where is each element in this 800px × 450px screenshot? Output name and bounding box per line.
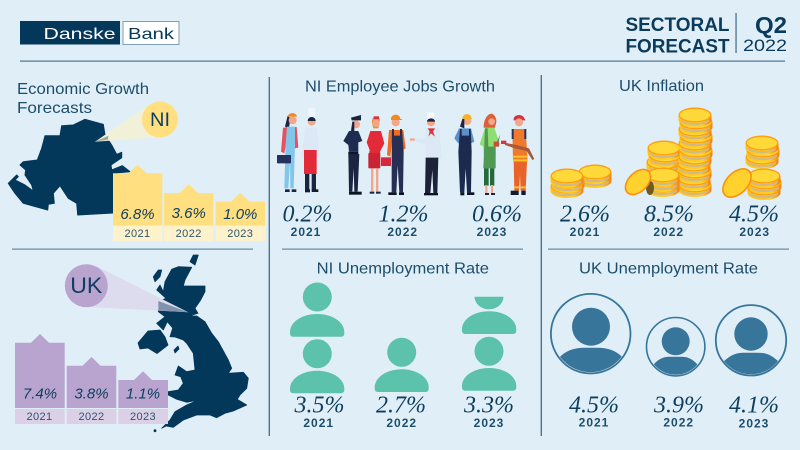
icon: person 2022 <box>375 338 429 392</box>
worker: gardener <box>480 114 500 195</box>
bar chart: NI growth: 2023 <box>227 228 253 240</box>
stat: UK unemployment 2021: 4.5% <box>569 392 619 418</box>
stat: inflation 2022: 8.5% <box>644 202 694 228</box>
stat: inflation 2022 <box>644 202 694 239</box>
worker: overalls with toolbox <box>277 113 298 192</box>
stat: inflation 2023: 2023 <box>739 225 770 239</box>
stat: jobs growth 2021: 2021 <box>291 225 321 239</box>
bar chart: NI growth <box>113 165 265 241</box>
stat: NI unemployment 2021: 2021 <box>303 416 334 430</box>
icon: coins 2021 <box>550 165 612 198</box>
worker: police officer <box>343 115 362 195</box>
heading: UK inflation: UK Inflation <box>619 78 704 95</box>
stat: NI unemployment 2023: 3.3% <box>463 392 514 418</box>
icon: people 2021 <box>290 282 344 393</box>
bar chart: UK growth: 2023 <box>130 411 156 423</box>
worker: flight attendant <box>367 116 384 194</box>
stat: UK unemployment 2022: 2022 <box>663 416 694 430</box>
bar chart: NI growth: 3.6% <box>172 205 206 222</box>
stat: inflation 2021: 2021 <box>570 225 600 239</box>
heading: NI employee jobs growth: NI Employee Jobs Growth <box>305 78 495 96</box>
bar chart: UK growth: 7.4% <box>23 386 57 402</box>
bar chart: UK growth: 3.8% <box>74 386 109 402</box>
logo: Danske Bank: Bank <box>128 26 175 43</box>
callout: UK <box>65 264 188 312</box>
title: sectoral forecast Q2 2022: SECTORAL <box>626 15 730 36</box>
stat: UK unemployment 2022 <box>653 392 704 430</box>
stat: UK unemployment 2023 <box>729 392 779 430</box>
stat: NI unemployment 2023 <box>463 392 514 430</box>
stat: UK unemployment 2023: 4.1% <box>729 392 779 418</box>
bar chart: NI growth: 2022 <box>176 228 202 240</box>
callout: NI <box>95 102 178 142</box>
stat: NI unemployment 2022 <box>376 392 426 430</box>
icon: coins 2023 <box>718 136 782 202</box>
icon: person circle 2022 <box>646 318 705 380</box>
stat: jobs growth 2021: 0.2% <box>282 202 332 228</box>
stat: inflation 2021: 2.6% <box>560 202 610 228</box>
stat: NI unemployment 2022: 2022 <box>386 416 417 430</box>
icon: person circle 2021 <box>551 294 630 380</box>
illustration: workers group two <box>410 112 534 195</box>
map: United Kingdom <box>138 255 248 432</box>
title: sectoral forecast Q2 2022 <box>626 12 787 58</box>
bar chart: UK growth: 2022 <box>78 411 105 423</box>
title: sectoral forecast Q2 2022: FORECAST <box>626 36 730 58</box>
bar chart: NI growth: 2021 <box>124 228 151 240</box>
stat: jobs growth 2022 <box>378 202 428 239</box>
heading: economic growth forecasts <box>17 81 149 117</box>
stat: jobs growth 2021 <box>282 202 332 239</box>
callout: NI: NI <box>150 110 170 131</box>
stat: UK unemployment 2023: 2023 <box>739 416 769 430</box>
illustration: workers group one <box>277 108 406 195</box>
worker: builder with toolbox <box>381 115 406 195</box>
icon: people 2023 <box>462 297 516 391</box>
heading: economic growth forecasts: Forecasts <box>17 100 92 117</box>
bar chart: UK growth: 1.1% <box>126 386 160 402</box>
stat: inflation 2021 <box>560 202 610 239</box>
stat: NI unemployment 2021: 3.5% <box>294 392 344 418</box>
heading: UK unemployment rate: UK Unemployment Rate <box>579 260 758 277</box>
stat: inflation 2022: 2022 <box>653 225 684 239</box>
bar chart: UK growth: 2021 <box>26 411 53 423</box>
stat: jobs growth 2022: 2022 <box>387 225 418 239</box>
callout: UK: UK <box>70 273 103 298</box>
worker: chef <box>301 108 320 192</box>
stat: NI unemployment 2021 <box>294 392 344 430</box>
icon: coins 2022 <box>621 108 712 199</box>
map: Northern Ireland <box>8 119 130 215</box>
title: sectoral forecast Q2 2022: Q2 <box>755 12 787 38</box>
stat: inflation 2023 <box>729 202 779 239</box>
worker: firefighter <box>501 115 534 195</box>
stat: jobs growth 2023 <box>472 202 522 239</box>
logo: Danske Bank: Danske <box>44 26 116 43</box>
bar chart: UK growth <box>15 334 168 424</box>
stat: jobs growth 2023: 2023 <box>477 225 507 239</box>
stat: jobs growth 2022: 1.2% <box>378 202 428 228</box>
stat: NI unemployment 2023: 2023 <box>474 416 504 430</box>
heading: economic growth forecasts: Economic Growth <box>17 81 149 98</box>
stat: inflation 2023: 4.5% <box>729 202 779 228</box>
worker: chef in white <box>410 112 442 195</box>
stat: NI unemployment 2022: 2.7% <box>376 392 426 418</box>
stat: UK unemployment 2021: 2021 <box>579 416 609 430</box>
logo: Danske Bank <box>20 21 179 44</box>
stat: UK unemployment 2021 <box>569 392 619 430</box>
icon: person circle 2023 <box>716 305 786 380</box>
stat: UK unemployment 2022: 3.9% <box>653 392 704 418</box>
title: sectoral forecast Q2 2022: 2022 <box>743 37 787 55</box>
stat: jobs growth 2023: 0.6% <box>472 202 522 228</box>
bar chart: NI growth: 6.8% <box>120 206 155 223</box>
bar chart: NI growth: 1.0% <box>223 206 257 223</box>
worker: navy overalls <box>454 114 474 195</box>
heading: NI unemployment rate: NI Unemployment Rate <box>317 260 489 277</box>
